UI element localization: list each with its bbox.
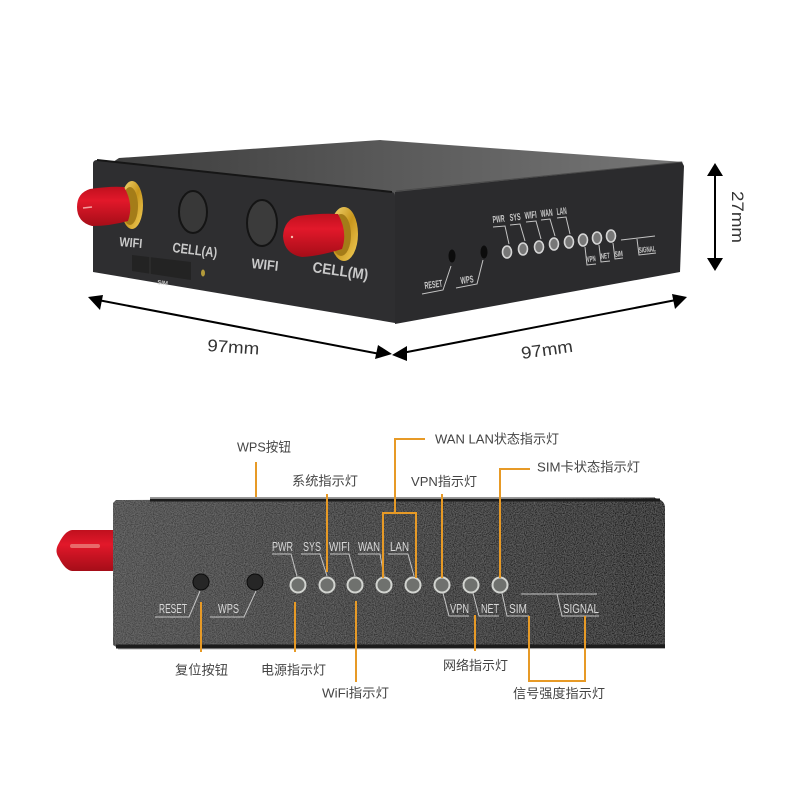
label WAN xyxy=(358,539,384,576)
label LAN xyxy=(388,539,414,576)
label RESET: RESET xyxy=(159,601,187,616)
RESET label: WPS xyxy=(460,274,474,287)
left face of router xyxy=(93,160,395,323)
label SYS xyxy=(301,539,327,576)
RESET label: RESET xyxy=(424,279,443,292)
indicator labels top row: WIFI xyxy=(524,210,537,222)
reset and WPS holes xyxy=(448,246,488,262)
LEDs xyxy=(502,230,616,258)
label SIM: SIM xyxy=(509,601,527,616)
label SIGNAL xyxy=(521,594,599,616)
callout: SIM status indicator: SIM卡状态指示灯 xyxy=(537,460,640,474)
callout: VPN indicator xyxy=(411,474,477,578)
SIM slot xyxy=(132,255,191,287)
dimension arrow: left 97mm xyxy=(88,295,392,359)
indicator dot xyxy=(201,270,205,276)
LED indicators xyxy=(290,578,508,592)
indicator labels top row: PWR xyxy=(492,214,506,226)
perspective photo of router xyxy=(77,140,684,324)
indicator labels top row: WAN xyxy=(540,208,553,220)
body top edge xyxy=(150,496,655,498)
label SIM xyxy=(502,593,529,616)
top leader lines xyxy=(493,217,570,244)
callout: network indicator: 网络指示灯 xyxy=(443,658,508,673)
label WPS xyxy=(210,591,256,617)
callout: WPS button: WPS按钮 xyxy=(237,440,291,454)
body bottom edge xyxy=(116,644,665,648)
label SIGNAL: SIGNAL xyxy=(563,601,599,616)
callout: power indicator: 电源指示灯 xyxy=(261,662,326,678)
callout: WiFi indicator xyxy=(322,601,389,700)
callout: reset button xyxy=(175,602,228,678)
SIM slot: SIM xyxy=(157,280,168,287)
callout: VPN indicator: VPN指示灯 xyxy=(411,474,477,489)
lower indicator labels: VPN xyxy=(586,254,596,264)
top face of router xyxy=(110,140,684,196)
callout: network indicator xyxy=(443,615,508,673)
WPS hole xyxy=(247,574,263,590)
reset hole xyxy=(193,574,209,590)
label WIFI: WIFI xyxy=(119,234,143,251)
right face of router xyxy=(395,162,684,324)
dimension label: 27mm: 27mm xyxy=(728,191,747,243)
callout: reset button: 复位按钮 xyxy=(175,662,228,678)
label WIFI xyxy=(329,539,355,576)
device body xyxy=(113,498,665,648)
indicator labels top row xyxy=(492,206,567,226)
label WIFI: WIFI xyxy=(329,539,350,554)
label CELL(M): CELL(M) xyxy=(311,259,369,284)
callout: WAN LAN status indicator xyxy=(383,432,559,578)
label WIFI 2: WIFI xyxy=(251,255,279,274)
dimension arrow: height 27mm xyxy=(707,163,723,271)
label WAN: WAN xyxy=(358,539,380,554)
dimension arrow: right 97mm xyxy=(392,294,687,361)
dimension label: left 97mm: 97mm xyxy=(207,336,260,359)
label PWR xyxy=(272,539,297,576)
button: wifi xyxy=(247,200,277,246)
callout: system indicator: 系统指示灯 xyxy=(292,474,358,488)
lower indicator labels xyxy=(585,236,656,265)
label LAN: LAN xyxy=(390,539,409,554)
label NET: NET xyxy=(481,601,499,616)
label VPN: VPN xyxy=(450,601,469,616)
callout: signal strength indicator: 信号强度指示灯 xyxy=(513,686,605,701)
antenna connector: right xyxy=(283,207,358,261)
button: cell A xyxy=(179,191,207,233)
label PWR: PWR xyxy=(272,539,293,554)
antenna stub xyxy=(56,530,113,571)
lower indicator labels: SIM xyxy=(614,249,623,259)
label CELL(A): CELL(A) xyxy=(172,239,218,260)
callout: WPS button xyxy=(237,440,291,497)
dimension label: right 97mm: 97mm xyxy=(520,337,574,363)
lower indicator labels: SIGNAL xyxy=(638,244,656,255)
lower indicator labels: NET xyxy=(600,251,610,261)
RESET label xyxy=(422,260,483,294)
label WPS: WPS xyxy=(218,601,239,616)
indicator labels top row: SYS xyxy=(509,212,521,224)
label NET xyxy=(473,593,499,616)
callout: system indicator xyxy=(292,474,358,572)
indicator labels top row: LAN xyxy=(556,206,567,218)
callout: power indicator xyxy=(261,602,326,678)
label RESET xyxy=(155,591,200,617)
antenna connector: left xyxy=(77,181,143,229)
front panel photo of router xyxy=(56,498,665,649)
callout: signal strength indicator xyxy=(513,616,605,701)
callout: WAN LAN status indicator: WAN LAN状态指示灯 xyxy=(435,432,559,446)
label SYS: SYS xyxy=(303,539,321,554)
callout: SIM status indicator xyxy=(500,460,640,578)
label VPN xyxy=(443,593,469,616)
callout: WiFi indicator: WiFi指示灯 xyxy=(322,686,389,700)
